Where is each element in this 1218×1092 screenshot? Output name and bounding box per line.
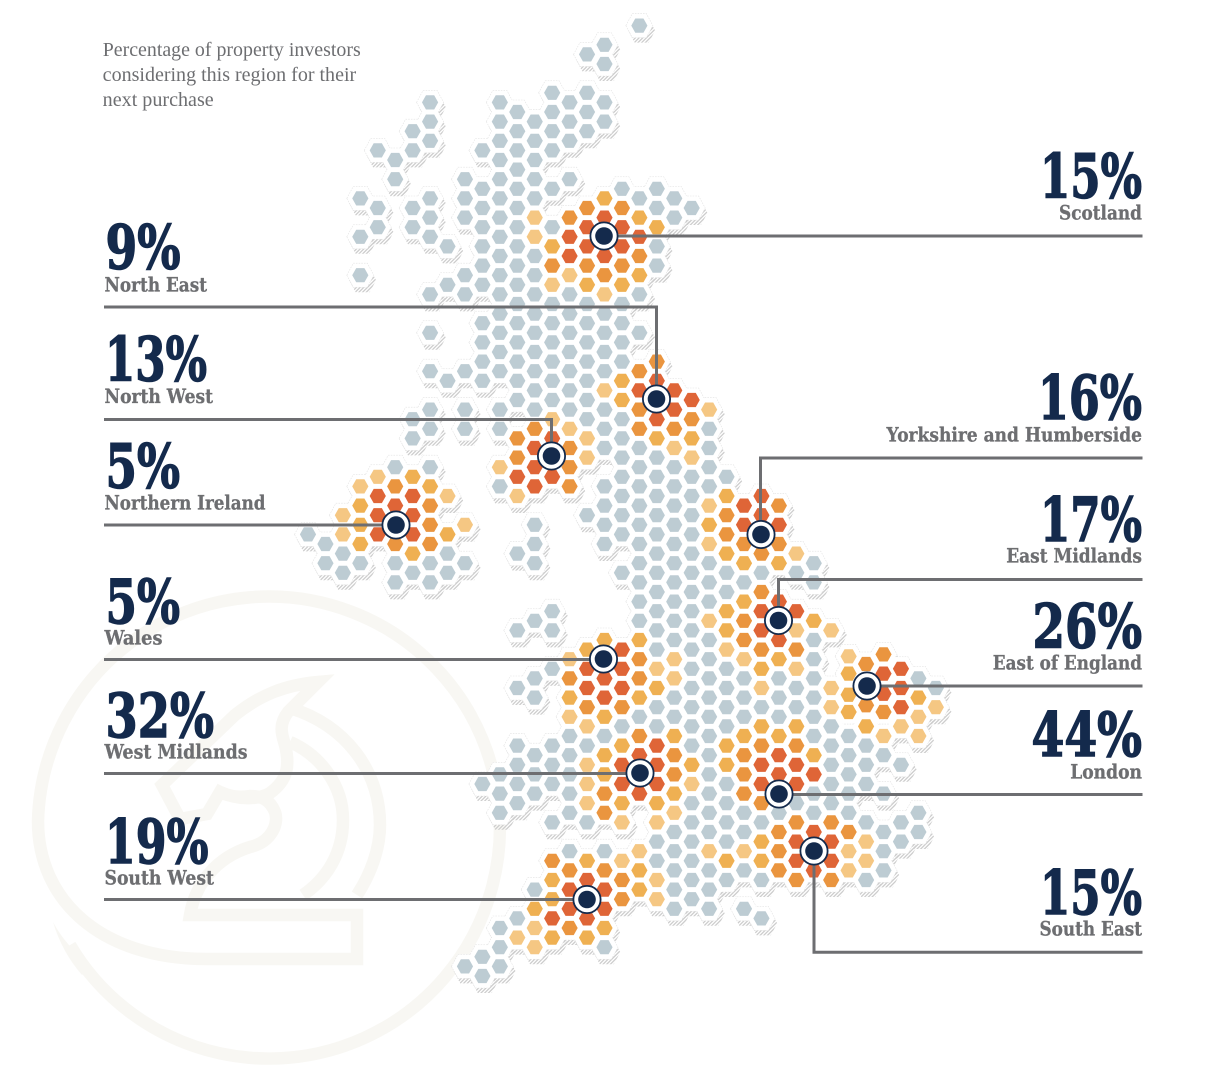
callout: East Midlands: 17% [1040, 485, 1142, 556]
callout: Wales [104, 567, 617, 673]
callout: South West: South West [104, 866, 214, 890]
callout: South East: South East [1040, 918, 1142, 940]
callout: North East: 9% [106, 212, 180, 284]
callout: Northern Ireland: 5% [106, 432, 180, 502]
callout: Northern Ireland [104, 432, 410, 539]
callout: East of England: 26% [1032, 592, 1142, 662]
callout: Scotland: 15% [1040, 142, 1142, 212]
intro text: Percentage of property investors [103, 39, 361, 61]
callout: West Midlands [104, 681, 654, 787]
callout: Northern Ireland: Northern Ireland [104, 492, 266, 514]
callout: North East [104, 212, 670, 413]
callout: Wales: Wales [104, 626, 163, 650]
watermark: knight logo [38, 597, 500, 1059]
callout: North East: North East [104, 274, 207, 297]
callout: Scotland [590, 142, 1142, 250]
callout: South West: 19% [105, 807, 208, 878]
callout: South West [104, 807, 601, 913]
callout: London: 44% [1032, 700, 1142, 771]
callout: West Midlands: 32% [106, 681, 214, 752]
callout: West Midlands: West Midlands [104, 740, 248, 764]
callout: Yorkshire and Humberside: Yorkshire and Humberside [886, 424, 1142, 447]
callout: East Midlands: East Midlands [1006, 545, 1142, 568]
callout: North West: North West [104, 385, 213, 408]
callout: South East [800, 837, 1142, 952]
intro text: next purchase [103, 89, 214, 111]
callout: Yorkshire and Humberside [747, 363, 1142, 548]
callout: East Midlands [765, 485, 1142, 634]
hexagon map of the UK [308, 26, 936, 976]
callout: North West: 13% [105, 324, 207, 396]
callout: Scotland: Scotland [1059, 202, 1142, 224]
callout: South East: 15% [1040, 858, 1142, 929]
callout: London: London [1070, 760, 1142, 783]
callout: East of England [853, 592, 1142, 700]
intro text: considering this region for their [103, 64, 357, 86]
callout: North West [104, 324, 565, 470]
callout: East of England: East of England [993, 652, 1142, 674]
callout: Wales: 5% [106, 567, 180, 638]
callout: Yorkshire and Humberside: 16% [1038, 363, 1142, 434]
intro text [103, 39, 361, 111]
callout: London [765, 700, 1142, 808]
